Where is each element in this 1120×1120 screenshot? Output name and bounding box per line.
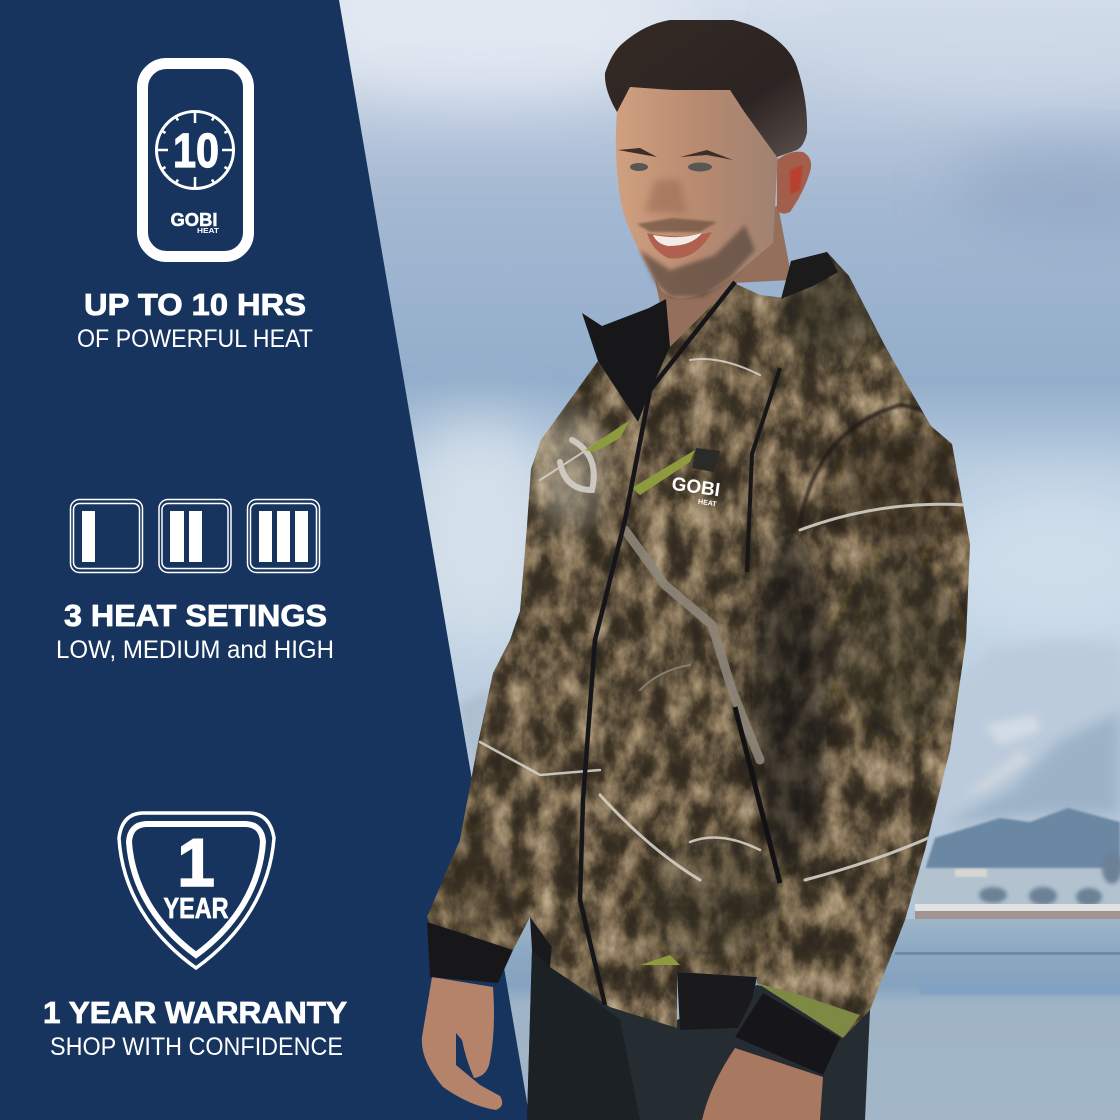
feature: battery life bbox=[77, 64, 313, 353]
heading: 1 YEAR WARRANTY bbox=[43, 995, 347, 1030]
ear bbox=[777, 152, 811, 214]
hair bbox=[605, 20, 807, 157]
subheading: OF POWERFUL HEAT bbox=[77, 325, 313, 353]
feature: heat settings bbox=[56, 500, 334, 664]
left cuff bbox=[427, 922, 513, 983]
icon: battery with 10 hour clock bbox=[142, 64, 248, 256]
distant snowy mountains bbox=[930, 640, 1120, 830]
subheading: SHOP WITH CONFIDENCE bbox=[50, 1033, 343, 1061]
hood drawstring bbox=[747, 368, 780, 572]
smile bbox=[647, 232, 712, 258]
icon: warranty shield bbox=[119, 813, 274, 968]
icon: high setting bbox=[248, 500, 320, 572]
left hand bbox=[422, 977, 502, 1110]
eyes and eyebrows bbox=[618, 148, 733, 172]
right hand bbox=[702, 1048, 823, 1120]
blue hills bbox=[925, 808, 1120, 872]
Gobi Heat logo: GOBI bbox=[170, 210, 218, 230]
neck bbox=[655, 205, 792, 350]
feature: warranty bbox=[43, 813, 347, 1061]
inner lining at waist bbox=[530, 917, 552, 967]
light and dark shading bbox=[440, 260, 960, 960]
chest heat badge and logo bbox=[670, 448, 721, 508]
nose shadow bbox=[645, 180, 687, 214]
branch details bbox=[480, 359, 965, 880]
icon: warranty shield: 1 bbox=[177, 825, 215, 901]
trousers bbox=[527, 950, 870, 1120]
shoulder seam bbox=[798, 402, 924, 525]
chest heat badge and logo: GOBI bbox=[670, 474, 721, 501]
lake bbox=[500, 919, 1120, 1120]
icon: low setting bbox=[70, 500, 142, 572]
chest heat badge and logo: HEAT bbox=[698, 499, 718, 508]
navy diagonal panel bbox=[0, 0, 530, 1120]
subheading: LOW, MEDIUM and HIGH bbox=[56, 636, 334, 664]
front zipper bbox=[580, 282, 735, 1005]
icon: warranty shield: YEAR bbox=[164, 893, 229, 925]
man wearing heated camo jacket bbox=[420, 20, 980, 1120]
heading: UP TO 10 HRS bbox=[84, 287, 306, 322]
face bbox=[616, 87, 778, 298]
jacket body with camo pattern bbox=[420, 240, 980, 1040]
heading: 3 HEAT SETINGS bbox=[64, 598, 327, 633]
icon: battery with 10 hour clock: 10 bbox=[173, 125, 219, 178]
Gobi Heat logo: HEAT bbox=[197, 228, 220, 235]
inner fleece collar bbox=[582, 299, 670, 422]
stubble shadow bbox=[640, 225, 755, 297]
icon: medium setting bbox=[159, 500, 231, 572]
moss accents bbox=[632, 450, 695, 495]
hood lining bbox=[781, 252, 838, 299]
right cuff bbox=[735, 993, 840, 1075]
pocket zipper bbox=[735, 707, 780, 883]
hem ribbing bbox=[677, 972, 757, 1030]
shoreline with town and trees bbox=[915, 868, 1120, 906]
